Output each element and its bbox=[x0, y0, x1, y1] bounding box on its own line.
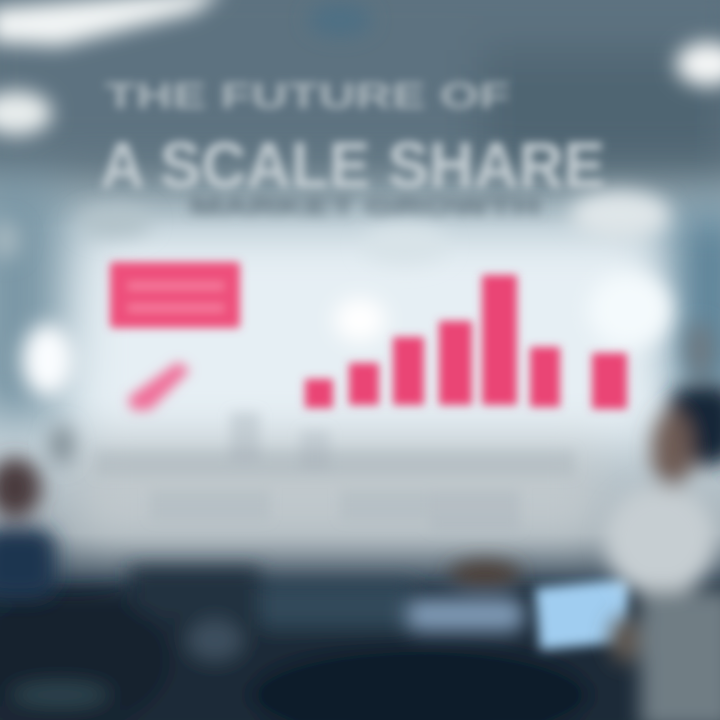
audience member: left bbox=[0, 425, 74, 598]
title bbox=[100, 75, 605, 220]
audience member: centre bbox=[405, 561, 525, 632]
title line 1: THE FUTURE OF bbox=[105, 75, 510, 116]
audience member: right bbox=[604, 322, 720, 720]
pink arrow mark bbox=[128, 362, 190, 410]
bar chart bbox=[305, 275, 627, 409]
ceiling bbox=[0, 0, 720, 420]
bar 6 bbox=[530, 347, 560, 407]
ceiling lights bbox=[0, 0, 720, 260]
title line 3: MARKET GROWTH bbox=[190, 193, 540, 220]
bar 1 bbox=[305, 379, 333, 408]
bar 3 bbox=[393, 337, 424, 405]
screen glow bbox=[22, 191, 672, 396]
title line 2: A SCALE SHARE bbox=[100, 128, 605, 202]
audience seating bbox=[0, 568, 720, 720]
laptop screen bbox=[535, 578, 630, 650]
bar 7 bbox=[592, 353, 627, 409]
skyline along the lower screen bbox=[95, 412, 575, 530]
bar 5 bbox=[482, 275, 517, 405]
bar 2 bbox=[349, 363, 379, 405]
bar 4 bbox=[439, 321, 472, 405]
presentation screen bbox=[80, 235, 655, 540]
pink label box bbox=[110, 262, 240, 328]
